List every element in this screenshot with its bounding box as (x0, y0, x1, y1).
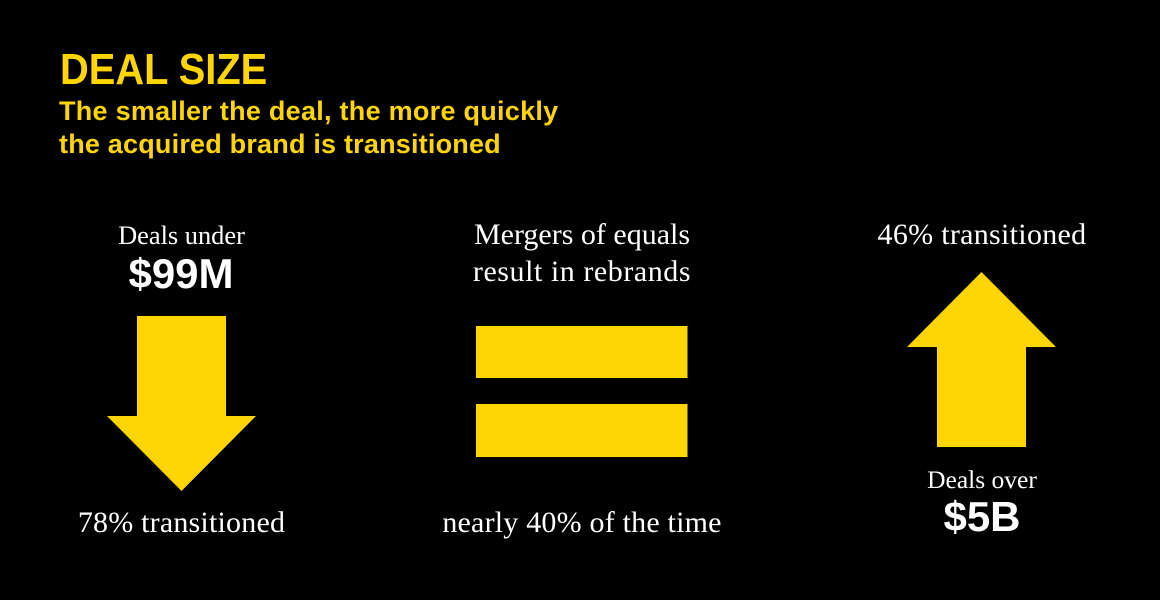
icon: equals sign (476, 326, 688, 457)
label: nearly 40%: nearly 40% of the time (442, 506, 722, 539)
label: mergers of equals: result in rebrands (473, 255, 691, 288)
title: DEAL SIZE (60, 45, 267, 94)
icon: down arrow (107, 316, 256, 491)
label: 78% transitioned: 78% transitioned (78, 506, 285, 539)
label: mergers of equals: Mergers of equals (474, 218, 690, 251)
icon: up arrow (907, 272, 1056, 447)
label: deals over: Deals over (927, 465, 1037, 494)
subtitle (59, 96, 558, 159)
value: $5B: $5B (943, 493, 1021, 540)
value: $99M: $99M (128, 250, 234, 297)
label: deals under: Deals under (118, 220, 245, 250)
subtitle: The smaller the deal, the more quickly (59, 96, 558, 126)
label: 46% transitioned: 46% transitioned (878, 218, 1086, 251)
label: mergers of equals (473, 218, 691, 288)
subtitle: the acquired brand is transitioned (59, 129, 501, 159)
